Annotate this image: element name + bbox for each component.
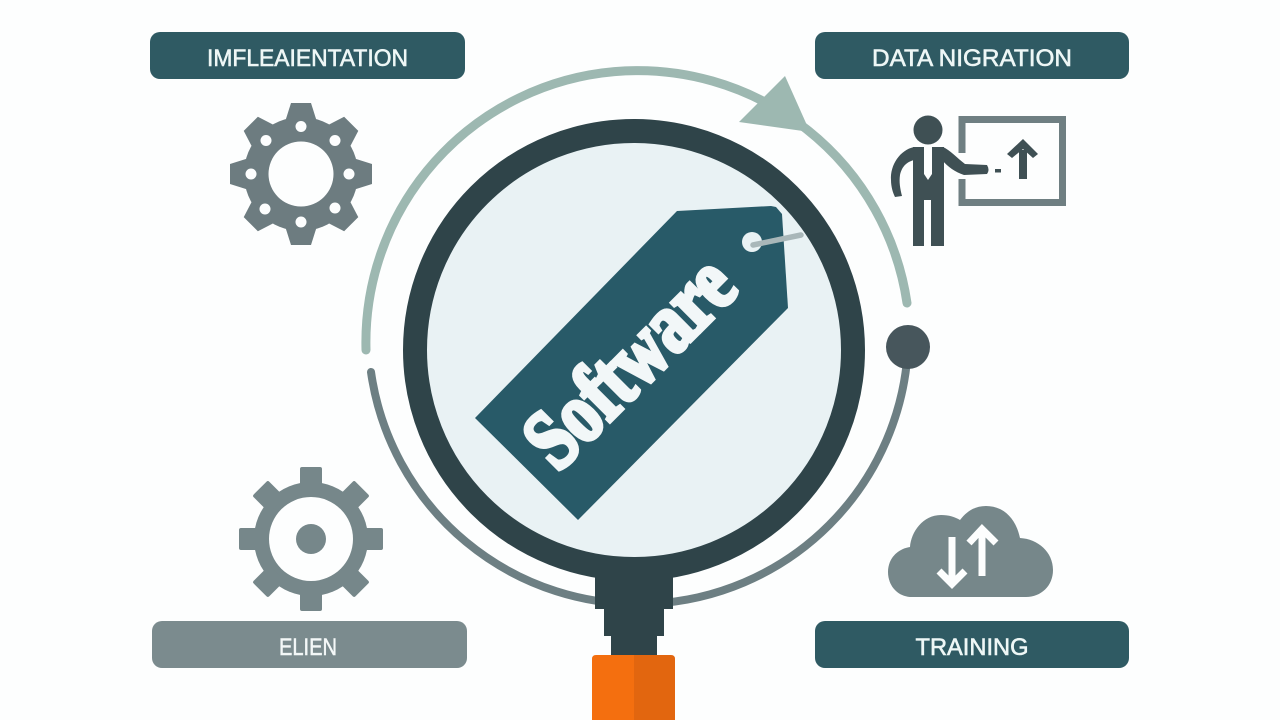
- label: data migration: DATA NIGRATION: [872, 45, 1072, 72]
- icon: cloud with arrows: [888, 506, 1053, 597]
- arc: lower cycle with end dot: [371, 325, 930, 604]
- up arrow: [969, 529, 996, 576]
- label: data migration: [815, 32, 1129, 79]
- label: training: [815, 621, 1129, 668]
- label: implementation: IMFLEAIENTATION: [207, 45, 408, 72]
- icon: gear with holes: [230, 103, 372, 245]
- handle collar: [595, 576, 673, 656]
- label: training: TRAINING: [916, 634, 1028, 661]
- icon: presenter at board: [891, 116, 1062, 246]
- handle grip: [592, 655, 675, 720]
- arc: upper cycle with arrow: [366, 71, 907, 350]
- board arrow: [1007, 139, 1038, 179]
- label: elien: [152, 621, 467, 668]
- lens: [415, 131, 853, 569]
- tag text: Software: [503, 236, 754, 487]
- magnifying glass: [415, 131, 853, 720]
- label: implementation: [150, 32, 465, 79]
- label: elien: ELIEN: [279, 634, 337, 661]
- tag hole and string: [742, 232, 801, 252]
- icon: gear with center dot: [239, 467, 383, 611]
- board: [962, 120, 1062, 202]
- presenter: [891, 116, 1001, 246]
- price tag: [475, 206, 801, 520]
- down arrow: [939, 537, 965, 584]
